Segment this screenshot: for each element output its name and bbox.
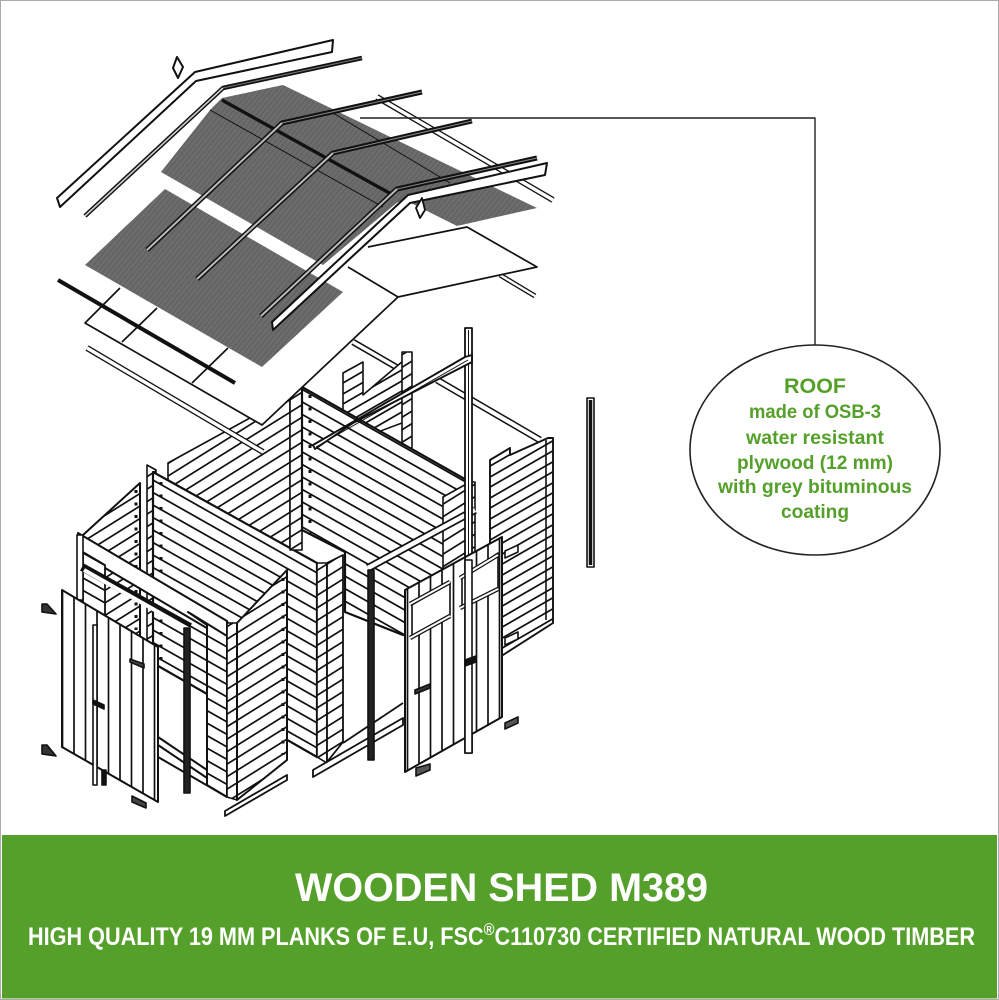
front wall dots	[282, 578, 284, 755]
shingle sheet: upper	[161, 110, 412, 265]
callout text: ROOF	[784, 375, 846, 398]
roof rail	[261, 158, 537, 316]
rear wall dots	[308, 395, 312, 535]
hinge	[42, 745, 56, 756]
sheet seams	[210, 110, 450, 207]
rear wall end piece	[443, 482, 475, 590]
left post of gable	[77, 535, 83, 600]
shingle sheet: lower	[85, 189, 343, 367]
rear large wall	[302, 387, 470, 635]
door latch	[465, 656, 476, 666]
shingle sheet: back slope	[222, 85, 537, 226]
leader line	[360, 118, 815, 346]
door handle	[415, 684, 430, 694]
front right wall	[237, 570, 287, 800]
hinge	[505, 632, 518, 645]
door latch	[93, 700, 104, 709]
right wall frame	[545, 440, 547, 620]
hinge	[42, 604, 56, 614]
front header	[368, 510, 475, 568]
rear top beam	[353, 342, 410, 375]
gable top beam	[78, 533, 227, 640]
callout: roof	[690, 345, 940, 555]
hinge	[132, 796, 146, 808]
callout text: with grey bituminous	[717, 477, 912, 498]
window	[412, 582, 450, 637]
back beam	[437, 380, 540, 440]
central post	[290, 388, 302, 550]
left short wall	[83, 483, 140, 640]
left end post	[147, 465, 156, 680]
small rear slats	[343, 355, 410, 445]
left door	[62, 590, 158, 802]
long left wall	[153, 472, 317, 757]
exploded shed: walls and doors	[42, 328, 594, 816]
central tall post	[465, 328, 472, 753]
left door post	[184, 628, 190, 793]
rear corner post	[402, 352, 412, 448]
truss	[313, 355, 472, 449]
long wall dots	[160, 482, 162, 668]
front diamond	[416, 198, 425, 218]
subtitle: ®	[484, 920, 495, 939]
callout text: water resistant	[745, 428, 885, 449]
front corner post	[227, 623, 237, 800]
ridge line	[222, 100, 393, 195]
door rod	[93, 625, 97, 785]
front post	[368, 570, 374, 760]
footer band	[2, 835, 997, 998]
top barge board	[57, 40, 333, 207]
roof rail	[147, 92, 422, 250]
threshold rail	[343, 703, 403, 743]
loose post	[587, 398, 594, 567]
short wall dots	[134, 490, 138, 630]
eave white rail	[87, 348, 263, 452]
sill	[225, 775, 287, 816]
subtitle: HIGH QUALITY 19 MM PLANKS OF E.U, FSC	[28, 923, 554, 951]
callout text: made of OSB-3	[749, 402, 881, 423]
top diamond	[173, 57, 183, 78]
callout text	[717, 375, 912, 523]
callout text: coating	[781, 502, 849, 523]
ridge strip	[210, 98, 405, 207]
hinge	[130, 659, 144, 668]
hinge	[416, 764, 430, 776]
back-left wall	[168, 396, 290, 550]
eave dark rail	[58, 280, 235, 383]
hinge	[505, 717, 518, 729]
slatted right wall	[490, 438, 553, 655]
roof rail	[197, 121, 472, 279]
door bolt	[102, 770, 106, 785]
right door pair	[405, 537, 502, 772]
window	[462, 553, 498, 608]
long wall end panel	[327, 555, 343, 762]
left door header	[82, 567, 190, 630]
door opening threshold	[158, 737, 227, 797]
exploded roof	[57, 40, 553, 452]
gable left planks	[83, 552, 105, 640]
plywood board	[85, 130, 537, 425]
wall corner strip	[317, 563, 327, 763]
gable right planks	[188, 612, 227, 797]
lower right rail	[500, 275, 535, 296]
window rails	[410, 555, 498, 638]
door pair centre post	[465, 560, 472, 753]
back rail	[377, 97, 553, 200]
title: WOODEN SHED M389	[295, 866, 708, 910]
hinge	[505, 545, 518, 558]
front barge board	[272, 163, 547, 330]
callout text: plywood (12 mm)	[737, 453, 893, 474]
sill	[313, 718, 403, 777]
ridge rail	[85, 58, 362, 216]
